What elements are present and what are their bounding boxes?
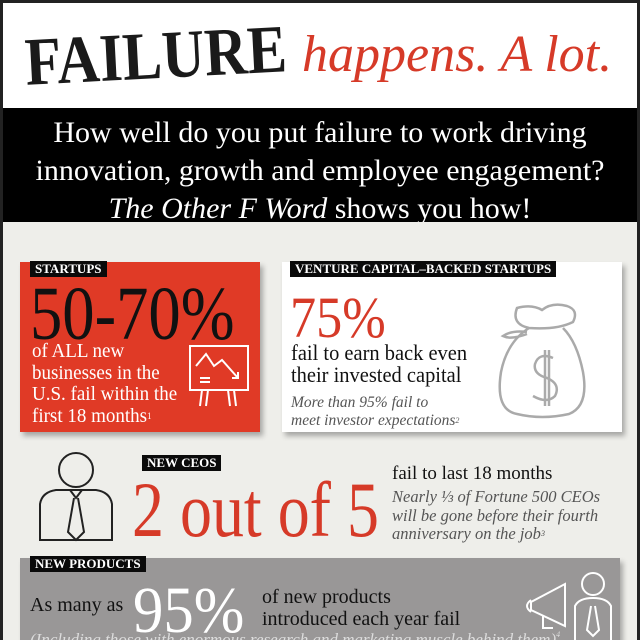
title: FAILURE: FAILURE	[23, 10, 289, 100]
panel: startups	[20, 262, 260, 432]
text: CEO footnote: Nearly ⅓ of Fortune 500 CEOs	[392, 487, 600, 506]
subtitle band: The Other F Word shows you how!	[109, 192, 531, 225]
panel: new products	[20, 558, 620, 640]
label: VC-backed startups: VENTURE CAPITAL–BACKED STARTUPS	[295, 261, 551, 276]
text: VC description	[291, 340, 467, 387]
text: startups description: first 18 months1	[32, 404, 151, 426]
text: products description: of new products	[262, 586, 391, 608]
stat: 75%: 75%	[290, 285, 386, 350]
label: new CEOs: NEW CEOS	[147, 455, 216, 470]
text: CEO description: fail to last 18 months	[392, 463, 552, 484]
text: CEO footnote	[392, 487, 600, 543]
subtitle band	[3, 108, 637, 222]
subtitle band: How well do you put failure to work driving	[53, 116, 587, 149]
text: VC footnote	[290, 394, 460, 429]
icon: megaphone person	[526, 572, 612, 640]
text: products description: introduced each year fail	[262, 608, 460, 630]
stat: 50-70%: 50-70%	[30, 272, 235, 356]
icon: money bag	[498, 303, 586, 418]
text: CEO footnote: will be gone before their fourth	[392, 506, 598, 524]
panel: VC-backed startups	[282, 262, 622, 432]
text: startups description: U.S. fail within the	[32, 383, 177, 405]
icon: declining chart easel	[189, 345, 249, 406]
main background	[3, 222, 637, 640]
text: startups description: of ALL new	[32, 340, 124, 362]
text: startups description	[32, 340, 177, 426]
subtitle band: innovation, growth and employee engagement?	[36, 154, 604, 187]
text: VC description: their invested capital	[291, 362, 461, 387]
text: VC description: fail to earn back even	[291, 340, 467, 365]
label: new products: NEW PRODUCTS	[35, 556, 141, 571]
text: as many as: As many as	[30, 594, 123, 616]
text: CEO footnote: anniversary on the job3	[392, 524, 545, 543]
text: VC footnote: More than 95% fail to	[291, 394, 428, 411]
stat: 2 out of 5: 2 out of 5	[132, 466, 379, 553]
icon: CEO person	[39, 452, 113, 542]
text: startups description: businesses in the	[32, 362, 160, 384]
text: VC footnote: meet investor expectations2	[291, 412, 459, 429]
text: products description	[262, 586, 460, 630]
label: startups: STARTUPS	[35, 261, 102, 276]
header panel	[3, 3, 637, 108]
title: happens. A lot.: happens. A lot.	[302, 26, 612, 83]
